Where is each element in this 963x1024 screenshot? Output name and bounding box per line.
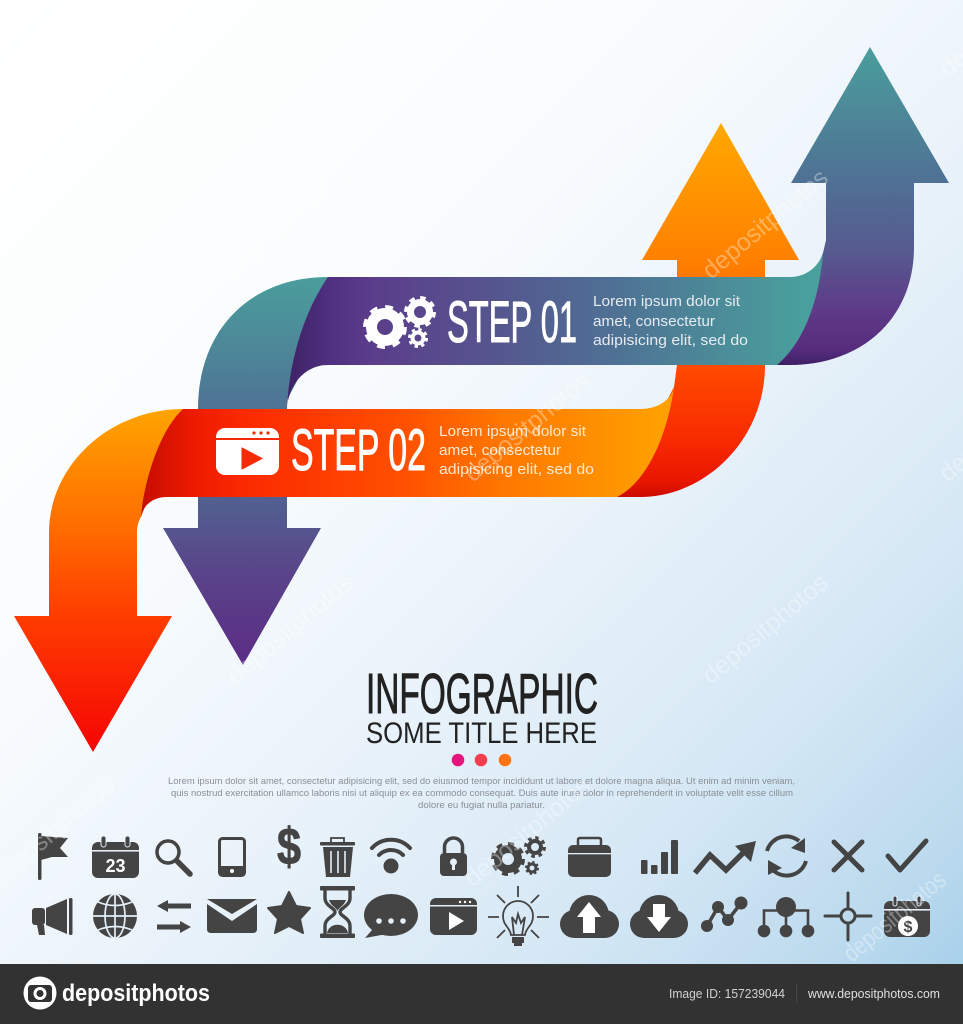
icon: envelope (207, 899, 257, 933)
text block: step 02 description (439, 423, 594, 478)
icon: padlock (440, 838, 467, 876)
text block: description paragraph: Lorem ipsum dolor sit amet, consectetur adipisicing elit, sed do eiusmod tempor incididunt ut labore et dolore magna aliqua. Ut enim ad minim veniam, (168, 776, 795, 786)
text block: step 01 description: Lorem ipsum dolor sit (593, 293, 741, 310)
icon: swap arrows (157, 900, 191, 933)
icon: crosshair (825, 893, 871, 940)
subtitle: SOME TITLE HERE (366, 717, 597, 750)
heading: step 01: STEP 01 (447, 290, 577, 355)
icon: video window dark (430, 898, 477, 935)
icon: calendar 23: 23 (105, 856, 126, 876)
icon row: bottom (32, 886, 930, 946)
logo: camera mark (24, 976, 56, 1010)
icon: hierarchy (758, 897, 814, 937)
website url: www.depositphotos.com (807, 987, 940, 1001)
watermark pattern: depositphotos (222, 164, 359, 285)
watermark pattern: depositphotos (459, 367, 596, 488)
icon: trash can (320, 838, 355, 877)
icon: bar chart (641, 840, 678, 874)
arrow: teal-purple upward (777, 47, 949, 365)
arrow: orange upward with red fold (617, 123, 799, 497)
icon: flag (38, 833, 68, 880)
text block: step 01 description: amet, consectetur (593, 313, 715, 330)
decorative dots (452, 754, 511, 766)
icon: check mark (888, 841, 926, 870)
heading: step 02: STEP 02 (291, 418, 426, 483)
text block: step 01 description (593, 293, 748, 349)
icon: star (268, 892, 310, 933)
icon: briefcase (568, 838, 611, 877)
icon: calendar dollar: $ (904, 919, 913, 936)
icon: cloud download (630, 895, 688, 938)
icon: cloud upload (560, 895, 619, 938)
icon: dollar: $ (277, 818, 301, 876)
icon: wifi (372, 840, 410, 874)
arrow: orange-red downward (14, 409, 183, 752)
text block: description paragraph: quis nostrud exercitation ullamco laboris nisi ut aliquip ex ea commodo consequat. Duis aute irure dolor in reprehenderit in voluptate velit esse cillum (171, 788, 793, 798)
icon: video window (216, 428, 279, 475)
icon: hourglass (320, 886, 355, 938)
icon: speech bubble (364, 894, 418, 938)
image id: Image ID: 157239044 (669, 987, 785, 1001)
icon: magnifier (157, 841, 190, 874)
icon: globe (93, 894, 137, 938)
arrow: teal-purple downward (163, 277, 345, 665)
icon: light bulb (488, 886, 549, 946)
icon: refresh (767, 836, 806, 876)
watermark pattern: depositphotos (222, 569, 359, 690)
footer bar (0, 964, 963, 1024)
icon: cross (834, 842, 862, 870)
watermark pattern: depositphotos (697, 569, 834, 690)
icon: megaphone (32, 898, 72, 935)
text block: step 01 description: adipisicing elit, sed do (593, 332, 748, 349)
panel: step 01 ribbon (287, 253, 823, 409)
icon row: top (38, 818, 926, 880)
watermark pattern: depositphotos (697, 164, 834, 285)
text block: step 02 description: amet, consectetur (439, 442, 561, 459)
text block: description paragraph (168, 776, 795, 810)
logo: wordmark: depositphotos (62, 980, 210, 1007)
icon: dark gears (493, 838, 544, 874)
text block: step 02 description: Lorem ipsum dolor sit (439, 423, 587, 440)
icon: trend arrow (695, 841, 756, 873)
icon: calendar 23 (92, 836, 139, 878)
text block: step 02 description: adipisicing elit, sed do (439, 461, 594, 478)
text block: description paragraph: dolore eu fugiat nulla pariatur. (418, 800, 545, 810)
title: INFOGRAPHIC (366, 662, 598, 726)
panel: step 02 ribbon (141, 387, 674, 517)
icon: calendar dollar (884, 896, 930, 937)
icon: connected nodes (701, 896, 748, 932)
icon: gears (366, 298, 434, 346)
icon: smartphone (220, 838, 244, 876)
watermark pattern: depositphotos (459, 772, 596, 893)
